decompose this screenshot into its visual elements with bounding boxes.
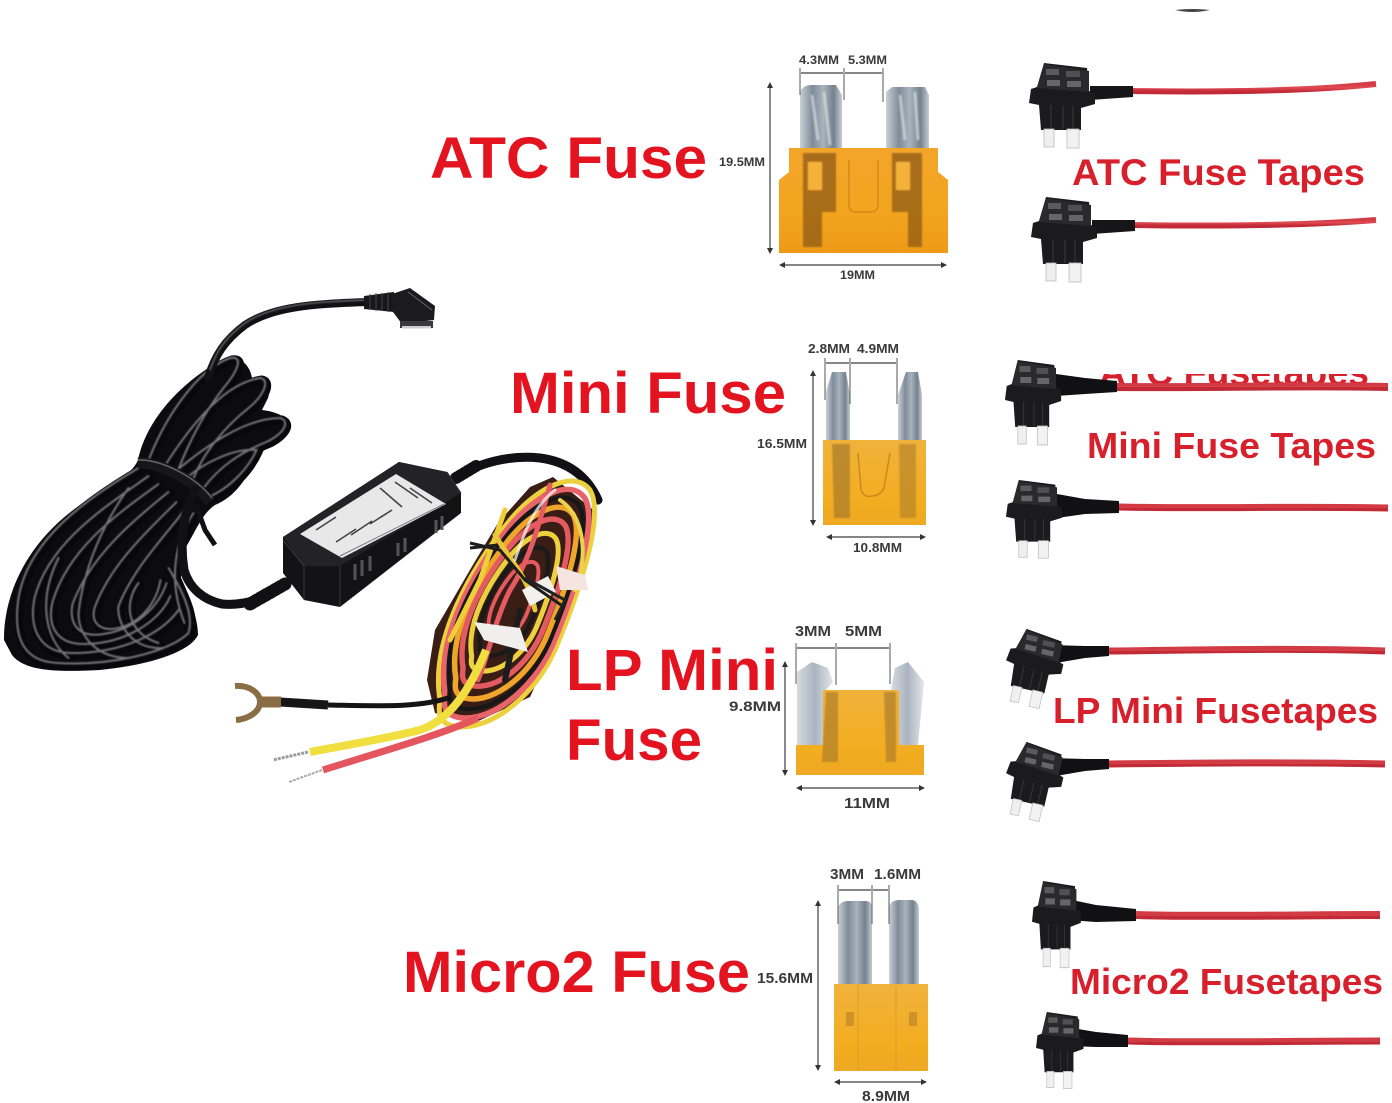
ATC fuse tap 2 <box>1031 197 1376 282</box>
dimension labels: 19.5MM <box>719 155 765 169</box>
dimension labels: 16.5MM <box>757 436 807 451</box>
dimension labels <box>729 623 890 812</box>
heading: Micro2 Fuse: Micro2 Fuse <box>403 940 750 1005</box>
dimension labels: 1.6MM <box>874 866 921 883</box>
Micro2 fuse diagram <box>757 866 928 1103</box>
LP Mini fuse tap 1 <box>997 626 1385 712</box>
dimension labels: 11MM <box>844 795 890 812</box>
cable to USB-C plug <box>208 302 366 378</box>
dimension labels: 4.3MM <box>799 53 839 67</box>
dimension labels: 4.9MM <box>857 341 899 356</box>
cables from module <box>182 457 598 604</box>
LP Mini fuse tap 2 <box>997 739 1385 825</box>
yellow stripped wire <box>273 650 486 760</box>
label: Micro2 Fusetapes: Micro2 Fusetapes <box>1070 961 1383 1002</box>
heading: LP Mini Fuse: Fuse <box>566 708 702 773</box>
module label <box>300 474 446 558</box>
Micro2 fuse tap 2 <box>1036 1012 1380 1088</box>
label: LP Mini Fusetapes: LP Mini Fusetapes <box>1053 690 1378 731</box>
dimension lines <box>815 885 927 1085</box>
Micro2 fuse tap 1 <box>1032 881 1380 968</box>
bundle of coloured wires <box>427 477 597 727</box>
ATC fuse tap 1 <box>1029 63 1376 148</box>
dimension labels: 15.6MM <box>757 970 813 987</box>
label: Mini Fuse Tapes: Mini Fuse Tapes <box>1087 425 1376 466</box>
dimension labels: 2.8MM <box>808 341 850 356</box>
top edge mark <box>1175 9 1210 12</box>
wire tags and twist ties <box>470 543 588 652</box>
Mini fuse tap 2 <box>1006 480 1388 558</box>
dimension labels: 3MM <box>795 623 831 640</box>
heading: ATC Fuse: ATC Fuse <box>430 126 707 191</box>
dimension labels: 5.3MM <box>848 53 887 67</box>
product photo: hardwire kit <box>4 288 598 782</box>
right-angle USB-C plug <box>364 288 435 328</box>
dimension labels: 9.8MM <box>729 698 781 714</box>
dimension labels <box>757 866 921 1103</box>
dimension labels <box>757 341 902 555</box>
Mini fuse diagram <box>757 341 926 555</box>
heading: LP Mini Fuse <box>566 638 778 773</box>
dimension labels: 5MM <box>845 623 882 640</box>
dimension lines <box>767 68 947 268</box>
Mini fuse tap 1 <box>1005 360 1388 445</box>
red stripped wire <box>289 718 478 782</box>
label: ATC Fuse Tapes: ATC Fuse Tapes <box>1072 152 1365 193</box>
black ground wire with fork terminal <box>235 686 451 720</box>
dimension labels: 10.8MM <box>853 540 902 555</box>
dimension lines <box>782 643 925 791</box>
clipped leftover caption: ATC Fusetapes <box>1099 352 1369 393</box>
coil of black cable <box>4 357 289 671</box>
inline power module <box>283 462 461 607</box>
dimension labels <box>719 53 887 282</box>
dimension labels: 19MM <box>840 268 875 282</box>
heading: LP Mini Fuse: LP Mini <box>566 638 778 703</box>
LP Mini fuse diagram <box>729 623 925 812</box>
dimension lines <box>810 358 926 540</box>
dimension labels: 3MM <box>830 866 864 883</box>
ATC fuse diagram <box>719 53 948 282</box>
heading: Mini Fuse: Mini Fuse <box>510 361 786 426</box>
